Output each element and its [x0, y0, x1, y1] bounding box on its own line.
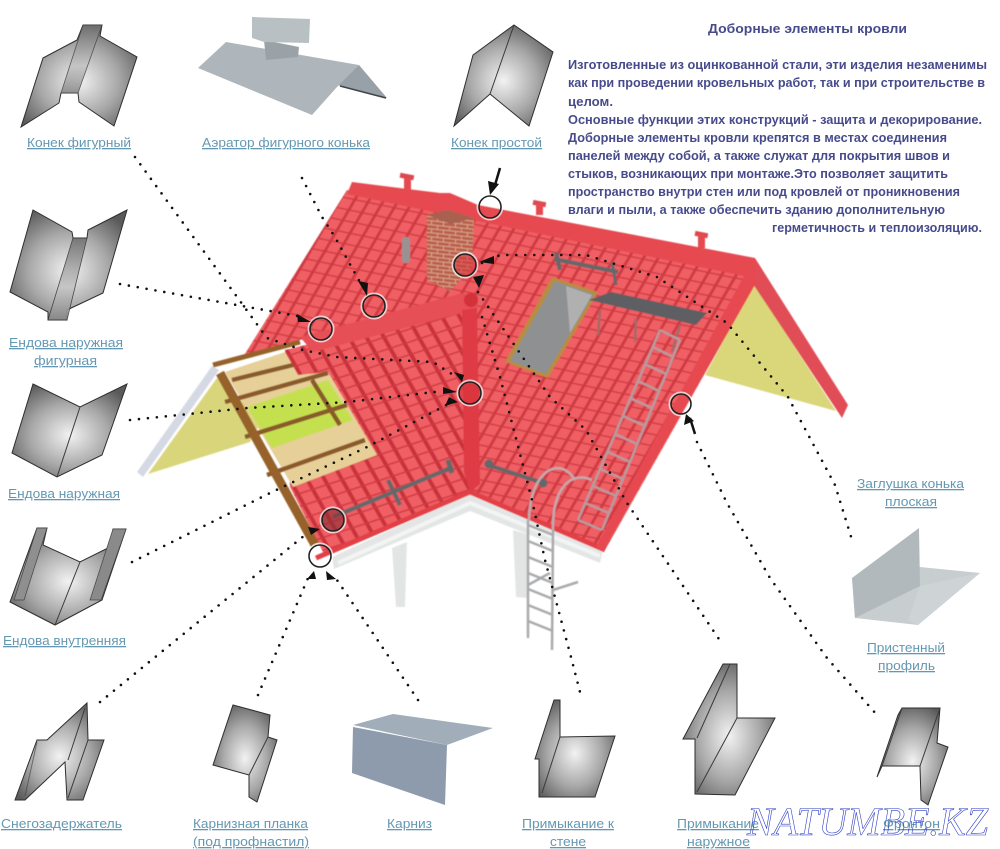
icon: аэратор: [198, 17, 387, 115]
icon: ендова наружная фигурная: [10, 210, 127, 320]
label: ендова наружная фигурная: [9, 335, 123, 368]
label: ендова наружная: Ендова наружная: [8, 486, 120, 501]
label: пристенный профиль: профиль: [878, 658, 935, 673]
label: примыкание к стене: [522, 816, 614, 849]
label: ендова наружная фигурная: Ендова наружная: [9, 335, 123, 350]
label: конек простой: Конек простой: [451, 135, 542, 150]
left gable: [137, 366, 262, 477]
eave strip: [316, 492, 605, 558]
icon: карнизная планка: [213, 705, 277, 802]
roof illustration: [137, 173, 848, 650]
snow guard: [333, 252, 618, 517]
icon: снегозадержатель: [15, 703, 104, 800]
main roof slope: [243, 190, 756, 550]
label: карнизная планка: (под профнастил): [193, 834, 309, 849]
text block: description: Изготовленные из оцинкованной стали, эти изделия незаменимы: [568, 58, 987, 72]
label: примыкание к стене: стене: [550, 834, 586, 849]
icon: фронтон: [877, 708, 948, 805]
service bench: [589, 292, 707, 352]
roof ladder: [578, 330, 680, 530]
icon: пристенный профиль: [852, 528, 980, 625]
text block: description: влаги и пыли, а также обеспечить зданию дополнительную: [568, 203, 945, 217]
icon: карниз: [352, 714, 493, 805]
label: заглушка конька: Заглушка конька: [857, 476, 965, 491]
title: Доборные элементы кровли: [708, 22, 907, 36]
dormer roof slope: [285, 305, 470, 556]
wall ladder: [528, 468, 592, 650]
text block: description: панелей между собой, а также служат для покрытия швов и: [568, 149, 950, 163]
label: примыкание наружное: Примыкание: [677, 816, 759, 831]
label: примыкание к стене: Примыкание к: [522, 816, 614, 831]
label: карнизная планка: Карнизная планка: [193, 816, 309, 831]
text block: description: пространство внутри стен или под кровлей от проникновения: [568, 185, 960, 199]
chimney: [427, 210, 474, 291]
icon: конек фигурный: [21, 25, 137, 127]
label: примыкание наружное: [677, 816, 759, 849]
text block: description: [568, 58, 987, 235]
text block: description: Доборные элементы кровли крепятся в местах соединения: [568, 131, 947, 145]
label: пристенный профиль: Пристенный: [867, 640, 945, 655]
label: снегозадержатель: Снегозадержатель: [1, 816, 122, 831]
aerator vent: [402, 237, 410, 263]
roof underlay and timber frame: [213, 342, 377, 545]
icon: ендова внутренняя: [10, 528, 126, 625]
label: карниз: Карниз: [387, 816, 432, 831]
text block: description: герметичность и теплоизоляцию.: [772, 221, 982, 235]
text block: description: целом.: [568, 95, 613, 109]
text block: description: стыков, возникающих при монтаже.Это позволяет защитить: [568, 167, 948, 181]
label: пристенный профиль: [867, 640, 945, 673]
watermark: NATUMBE.KZ: [746, 799, 989, 844]
label: заглушка конька: [857, 476, 965, 509]
dormer ridge and valley: [300, 293, 480, 492]
icon: примыкание наружное: [683, 664, 775, 795]
label: фронтон: Фронтон: [883, 816, 940, 831]
text block: description: Основные функции этих конструкций - защита и декорирование.: [568, 113, 982, 127]
right gable: [705, 258, 848, 418]
label: ендова наружная фигурная: фигурная: [34, 353, 97, 368]
marker circles and arrows: [297, 168, 695, 580]
icon: ендова наружная: [12, 384, 127, 477]
label: конек фигурный: Конек фигурный: [27, 135, 131, 150]
ridge band and rake: [347, 173, 756, 551]
gutter and supports: [332, 493, 603, 607]
icon: примыкание к стене: [535, 700, 615, 797]
icon: конек простой: [454, 25, 553, 126]
label: ендова внутренняя: Ендова внутренняя: [3, 633, 126, 648]
label: аэратор: Аэратор фигурного конька: [202, 135, 371, 150]
text block: description: как при проведении кровельных работ, так и при строительстве в: [568, 76, 985, 90]
label: заглушка конька: плоская: [885, 494, 937, 509]
skylight: [505, 277, 598, 378]
label: карнизная планка: [193, 816, 309, 849]
label: примыкание наружное: наружное: [687, 834, 750, 849]
leader lines: dotted: [100, 157, 877, 715]
